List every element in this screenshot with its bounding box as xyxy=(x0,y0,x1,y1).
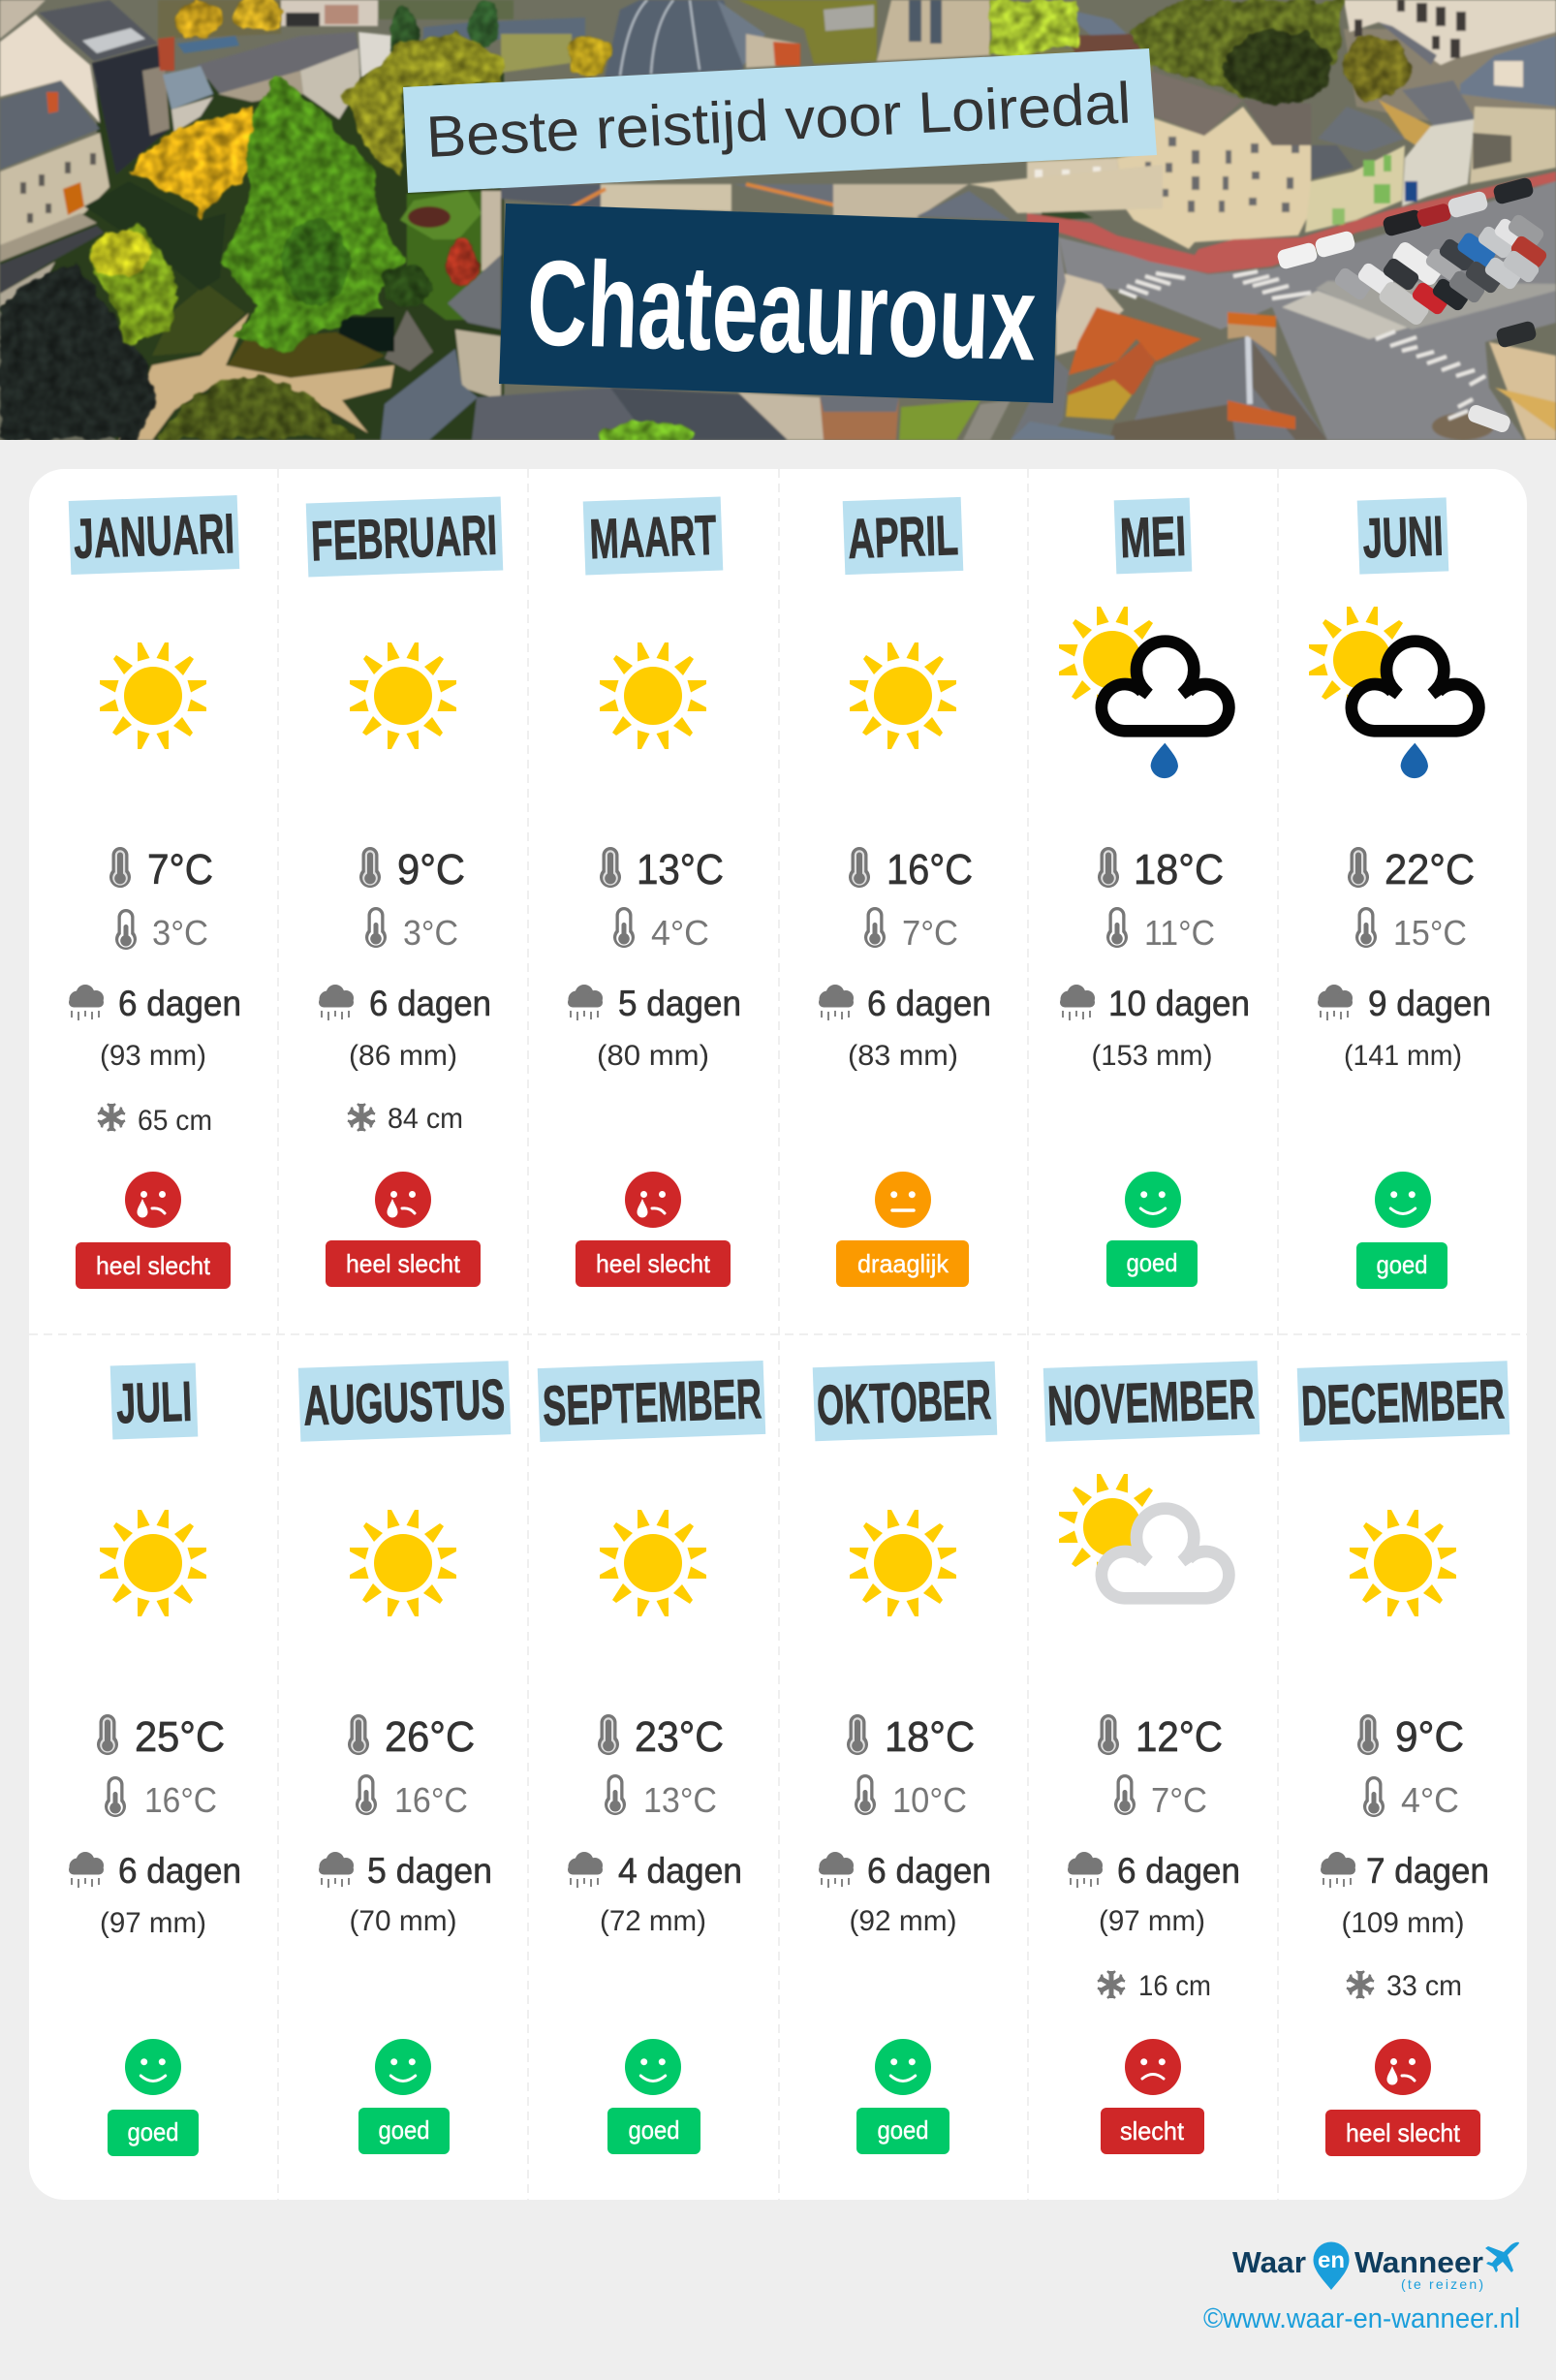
rainfall: (86 mm) xyxy=(349,1040,457,1072)
month heading: SEPTEMBER xyxy=(542,1367,762,1438)
rainfall: (141 mm) xyxy=(1344,1040,1462,1072)
month: januari xyxy=(69,495,241,1289)
low temperature: 4°C xyxy=(651,913,709,953)
snowfall: 65 cm xyxy=(138,1105,212,1137)
rainfall: (70 mm) xyxy=(349,1905,457,1937)
rain days: 9 dagen xyxy=(1368,984,1491,1023)
rainfall: (109 mm) xyxy=(1341,1907,1465,1939)
icon: crying face xyxy=(625,1172,681,1228)
rating badge: goed xyxy=(1126,1248,1178,1277)
rating badge: draaglijk xyxy=(857,1249,949,1278)
low temperature xyxy=(1355,907,1467,953)
month: mei xyxy=(1059,498,1250,1287)
snowfall: 33 cm xyxy=(1386,1970,1462,2002)
low temperature: 7°C xyxy=(902,913,958,953)
month heading xyxy=(813,1362,997,1441)
icon: sad face xyxy=(1125,2039,1181,2095)
icon: happy face xyxy=(625,2039,681,2095)
month: augustus xyxy=(298,1361,511,2154)
month heading xyxy=(583,497,723,575)
rain days xyxy=(568,1851,742,1891)
high temperature xyxy=(847,1713,975,1761)
low temperature: 16°C xyxy=(394,1780,468,1820)
subtitle text: Beste reistijd voor Loiredal xyxy=(424,71,1133,170)
icon: sun xyxy=(600,642,706,749)
icon: happy face xyxy=(125,2039,181,2095)
icon: map pin xyxy=(1314,2242,1349,2290)
trees and planting xyxy=(0,0,1410,454)
month heading xyxy=(1357,497,1448,575)
rating badge xyxy=(1101,2108,1204,2154)
icon: happy face xyxy=(875,2039,931,2095)
rain days: 6 dagen xyxy=(867,1851,991,1891)
month heading xyxy=(1114,498,1192,574)
icon: happy face xyxy=(1125,1172,1181,1228)
header photo: aerial view of Chateauroux xyxy=(0,0,1556,454)
low temperature xyxy=(105,1776,217,1820)
rating badge xyxy=(76,1242,231,1289)
rainfall: (93 mm) xyxy=(100,1040,206,1072)
icon: sun xyxy=(100,642,206,749)
low temperature: 15°C xyxy=(1393,913,1467,953)
low temperature: 16°C xyxy=(144,1780,217,1820)
month heading: FEBRUARI xyxy=(310,504,498,573)
icon: sun with cloud xyxy=(1059,1474,1229,1598)
icon: crying face xyxy=(1375,2039,1431,2095)
snowfall xyxy=(348,1103,463,1135)
high temperature: 9°C xyxy=(397,846,465,893)
rating badge xyxy=(856,2108,949,2154)
rating badge xyxy=(607,2108,700,2154)
low temperature: 3°C xyxy=(152,913,208,953)
month heading xyxy=(1043,1361,1260,1442)
snowfall xyxy=(1098,1970,1211,2002)
icon: crying face xyxy=(375,1172,431,1228)
high temperature xyxy=(600,846,724,893)
rating badge: heel slecht xyxy=(596,1249,711,1278)
month heading xyxy=(843,497,963,575)
high temperature: 18°C xyxy=(885,1713,975,1761)
icon: sun xyxy=(350,1510,456,1616)
icon: sun xyxy=(350,642,456,749)
month: juni xyxy=(1309,497,1491,1289)
low temperature xyxy=(115,909,208,953)
high temperature: 16°C xyxy=(887,846,973,893)
month heading: JUNI xyxy=(1361,505,1445,570)
month: december xyxy=(1297,1361,1509,2156)
rain days xyxy=(568,984,741,1023)
high temperature xyxy=(97,1713,225,1761)
title text: Chateauroux xyxy=(525,235,1038,386)
icon: neutral face xyxy=(875,1172,931,1228)
low temperature: 7°C xyxy=(1151,1780,1207,1820)
rating badge: heel slecht xyxy=(1346,2118,1461,2147)
parked cars xyxy=(1276,176,1548,434)
rain days: 6 dagen xyxy=(118,1851,241,1891)
month: juli xyxy=(69,1362,241,2156)
rain days: 5 dagen xyxy=(367,1851,492,1891)
logo: Waar en Wanneer xyxy=(1232,2242,1519,2292)
low temperature: 10°C xyxy=(892,1780,967,1820)
logo: Waar en Wanneer: (te reizen) xyxy=(1401,2276,1483,2292)
snowfall: 84 cm xyxy=(388,1103,463,1135)
high temperature: 18°C xyxy=(1134,846,1224,893)
low temperature: 11°C xyxy=(1144,913,1215,953)
month heading: MAART xyxy=(588,504,718,571)
rainfall: (72 mm) xyxy=(600,1905,706,1937)
high temperature: 22°C xyxy=(1385,846,1475,893)
rain days: 5 dagen xyxy=(618,984,741,1023)
low temperature xyxy=(605,1774,717,1820)
rating badge: goed xyxy=(1376,1250,1428,1279)
rating badge: slecht xyxy=(1120,2116,1185,2145)
low temperature xyxy=(855,1774,967,1820)
low temperature xyxy=(1363,1776,1459,1820)
icon: sun xyxy=(600,1510,706,1616)
month heading: AUGUSTUS xyxy=(302,1367,506,1438)
rainfall: (80 mm) xyxy=(597,1040,709,1072)
low temperature: 3°C xyxy=(403,913,458,953)
rating badge xyxy=(108,2110,199,2156)
rain days xyxy=(1318,984,1491,1023)
rain days: 6 dagen xyxy=(369,984,491,1023)
rainfall: (97 mm) xyxy=(100,1907,206,1939)
high temperature: 23°C xyxy=(635,1713,724,1761)
rainfall: (97 mm) xyxy=(1099,1905,1205,1937)
rain days: 7 dagen xyxy=(1366,1851,1489,1891)
low temperature: 4°C xyxy=(1401,1780,1459,1820)
high temperature: 9°C xyxy=(1395,1713,1464,1761)
month: oktober xyxy=(813,1362,997,2154)
month heading xyxy=(298,1361,511,1442)
icon: happy face xyxy=(375,2039,431,2095)
low temperature xyxy=(365,907,458,953)
low temperature: 13°C xyxy=(643,1780,717,1820)
low temperature xyxy=(1114,1774,1207,1820)
rain days xyxy=(819,1851,991,1891)
rating badge: heel slecht xyxy=(346,1249,461,1278)
logo: Waar en Wanneer: Waar xyxy=(1232,2245,1306,2279)
month heading xyxy=(69,495,239,575)
rating badge: goed xyxy=(878,2115,928,2145)
rain days: 4 dagen xyxy=(618,1851,742,1891)
website credit: ©www.waar-en-wanneer.nl xyxy=(1203,2303,1520,2334)
low temperature xyxy=(1106,907,1215,953)
month heading xyxy=(538,1361,765,1442)
high temperature xyxy=(598,1713,724,1761)
high temperature: 13°C xyxy=(637,846,724,893)
low temperature xyxy=(864,907,958,953)
title banner xyxy=(499,204,1059,403)
icon: map pin: en xyxy=(1318,2247,1345,2272)
high temperature xyxy=(1098,1713,1223,1761)
month: april xyxy=(819,497,991,1287)
icon: sun xyxy=(100,1510,206,1616)
high temperature: 12°C xyxy=(1136,1713,1223,1761)
rain days xyxy=(1068,1851,1240,1891)
rating badge xyxy=(1356,1242,1447,1289)
icon: sun xyxy=(850,1510,956,1616)
rain days: 6 dagen xyxy=(118,984,241,1023)
high temperature xyxy=(1348,846,1475,893)
subtitle banner xyxy=(403,48,1157,193)
month heading xyxy=(306,496,503,577)
high temperature: 7°C xyxy=(147,846,213,893)
high temperature: 26°C xyxy=(385,1713,475,1761)
icon: sun xyxy=(850,642,956,749)
logo: Waar en Wanneer: Wanneer xyxy=(1354,2245,1483,2279)
month heading: JANUARI xyxy=(73,502,235,571)
rating badge: goed xyxy=(128,2117,178,2146)
rating badge xyxy=(836,1240,969,1287)
month heading: MEI xyxy=(1119,505,1187,570)
month: maart xyxy=(568,497,741,1287)
month heading: JULI xyxy=(115,1370,193,1435)
rating badge: goed xyxy=(628,2115,680,2145)
rating badge xyxy=(1106,1240,1198,1287)
rating badge xyxy=(358,2108,450,2154)
icon: crying face xyxy=(125,1172,181,1228)
rating badge xyxy=(1325,2110,1480,2156)
month heading: APRIL xyxy=(847,504,959,571)
rain days: 6 dagen xyxy=(867,984,991,1023)
rating badge xyxy=(576,1240,731,1287)
rating badge: heel slecht xyxy=(96,1251,211,1280)
snowfall xyxy=(98,1104,212,1137)
icon: sun with rain cloud xyxy=(1309,607,1478,778)
rain days xyxy=(69,984,241,1023)
rain days: 6 dagen xyxy=(1117,1851,1240,1891)
snowfall xyxy=(1347,1970,1462,2002)
rainfall: (153 mm) xyxy=(1091,1040,1213,1072)
icon: airplane xyxy=(1485,2242,1519,2272)
month heading xyxy=(110,1362,198,1440)
month: november xyxy=(1043,1361,1260,2154)
high temperature xyxy=(348,1713,475,1761)
rating badge xyxy=(326,1240,481,1287)
rain days xyxy=(819,984,991,1023)
icon: sun xyxy=(1350,1510,1456,1616)
low temperature xyxy=(613,907,709,953)
month: september xyxy=(538,1361,765,2154)
low temperature xyxy=(356,1774,468,1820)
high temperature xyxy=(109,846,213,893)
rainfall: (83 mm) xyxy=(848,1040,958,1072)
month: februari xyxy=(306,496,503,1287)
rain days: 10 dagen xyxy=(1108,984,1250,1023)
rain days xyxy=(69,1851,241,1891)
month heading: OKTOBER xyxy=(816,1368,992,1437)
high temperature xyxy=(359,846,465,893)
icon: happy face xyxy=(1375,1172,1431,1228)
rating badge: goed xyxy=(378,2115,430,2145)
main white panel xyxy=(29,469,1527,2200)
icon: sun with rain cloud xyxy=(1059,607,1229,778)
snowfall: 16 cm xyxy=(1138,1970,1211,2002)
rainfall: (92 mm) xyxy=(849,1905,957,1937)
rain days xyxy=(319,984,491,1023)
month heading: NOVEMBER xyxy=(1046,1367,1256,1438)
high temperature xyxy=(1357,1713,1464,1761)
high temperature xyxy=(1098,846,1224,893)
high temperature: 25°C xyxy=(135,1713,225,1761)
high temperature xyxy=(849,846,973,893)
